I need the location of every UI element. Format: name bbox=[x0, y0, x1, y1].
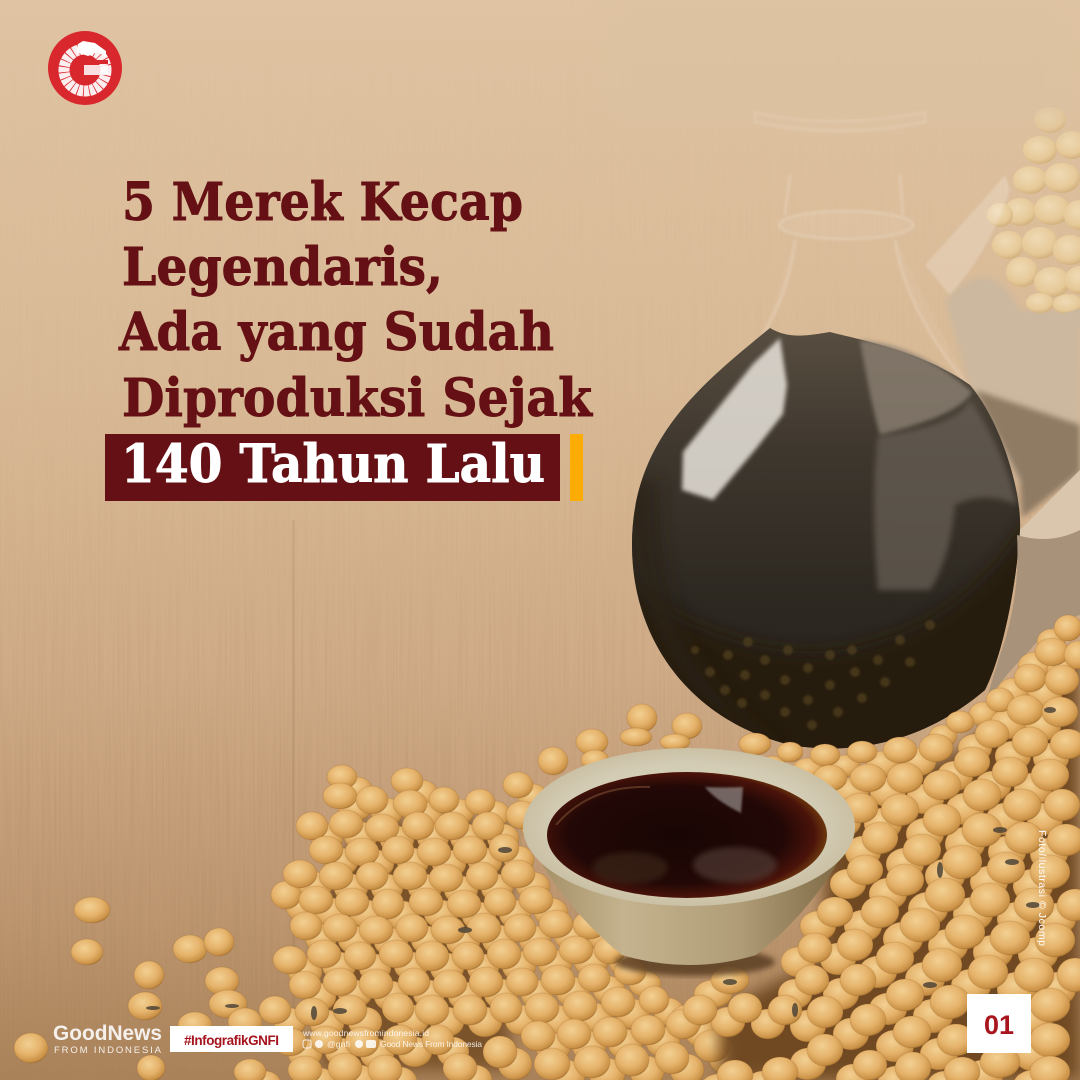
highlight on glass bbox=[682, 338, 787, 500]
title: main headline: Legendaris, bbox=[122, 237, 443, 298]
footer: website and social handles: @gnfi bbox=[327, 1039, 350, 1049]
footer: GoodNews logo: FROM INDONESIA bbox=[54, 1045, 162, 1056]
footer: website and social handles: www.goodnewsfromindonesia.id bbox=[302, 1028, 429, 1038]
icons: instagram and twitter bbox=[303, 1040, 323, 1048]
bowl rim bbox=[523, 748, 855, 906]
title: main headline bbox=[118, 172, 593, 429]
photo: scattered single soybeans, left bbox=[14, 897, 262, 1080]
title highlight: 140 Tahun Lalu: 140 Tahun Lalu bbox=[121, 434, 545, 495]
photo: pile of soybeans, right bbox=[666, 615, 1080, 1080]
footer: hashtag label: #InfografikGNFI bbox=[184, 1033, 279, 1048]
soy sauce surface bbox=[547, 772, 827, 898]
bottle body bbox=[632, 328, 1020, 748]
footer: hashtag label bbox=[170, 1026, 293, 1052]
bottle neck and glass bbox=[755, 112, 1010, 388]
footer: GoodNews logo: GoodNews bbox=[53, 1022, 162, 1045]
photo: bean hilum marks bbox=[146, 707, 1056, 1038]
footer: website and social handles bbox=[302, 1028, 482, 1049]
page number box: 01 bbox=[984, 1010, 1014, 1040]
bowl body bbox=[525, 826, 854, 965]
photo: soybeans near bowl top bbox=[538, 704, 771, 775]
sediment beans in the bottle bbox=[691, 620, 935, 730]
photo: pile of soybeans, left bbox=[234, 765, 822, 1080]
photo: glass bottle of soy sauce bbox=[632, 114, 1020, 748]
photo: ceramic bowl of soy sauce bbox=[523, 748, 855, 976]
photo: soy sack and beans behind bottle bbox=[945, 107, 1080, 518]
photo credit: Foto/ilustrasi © Jcomp bbox=[1036, 830, 1048, 946]
title: main headline: Ada yang Sudah bbox=[118, 302, 554, 363]
page number box bbox=[967, 994, 1031, 1053]
title: main headline: Diproduksi Sejak bbox=[122, 368, 593, 429]
footer: website and social handles: Good News From Indonesia bbox=[380, 1039, 482, 1049]
liquid upper grey reflection bbox=[860, 340, 972, 435]
footer: GoodNews logo bbox=[53, 1022, 162, 1056]
photo: burlap sack lower right bbox=[985, 470, 1080, 705]
accent bar bbox=[570, 434, 583, 501]
logo: GNFI garuda emblem bbox=[48, 31, 122, 105]
soft beige haze over top of photo bbox=[600, 0, 1080, 130]
title: main headline: 5 Merek Kecap bbox=[122, 172, 523, 233]
icons: facebook and youtube bbox=[355, 1040, 376, 1048]
